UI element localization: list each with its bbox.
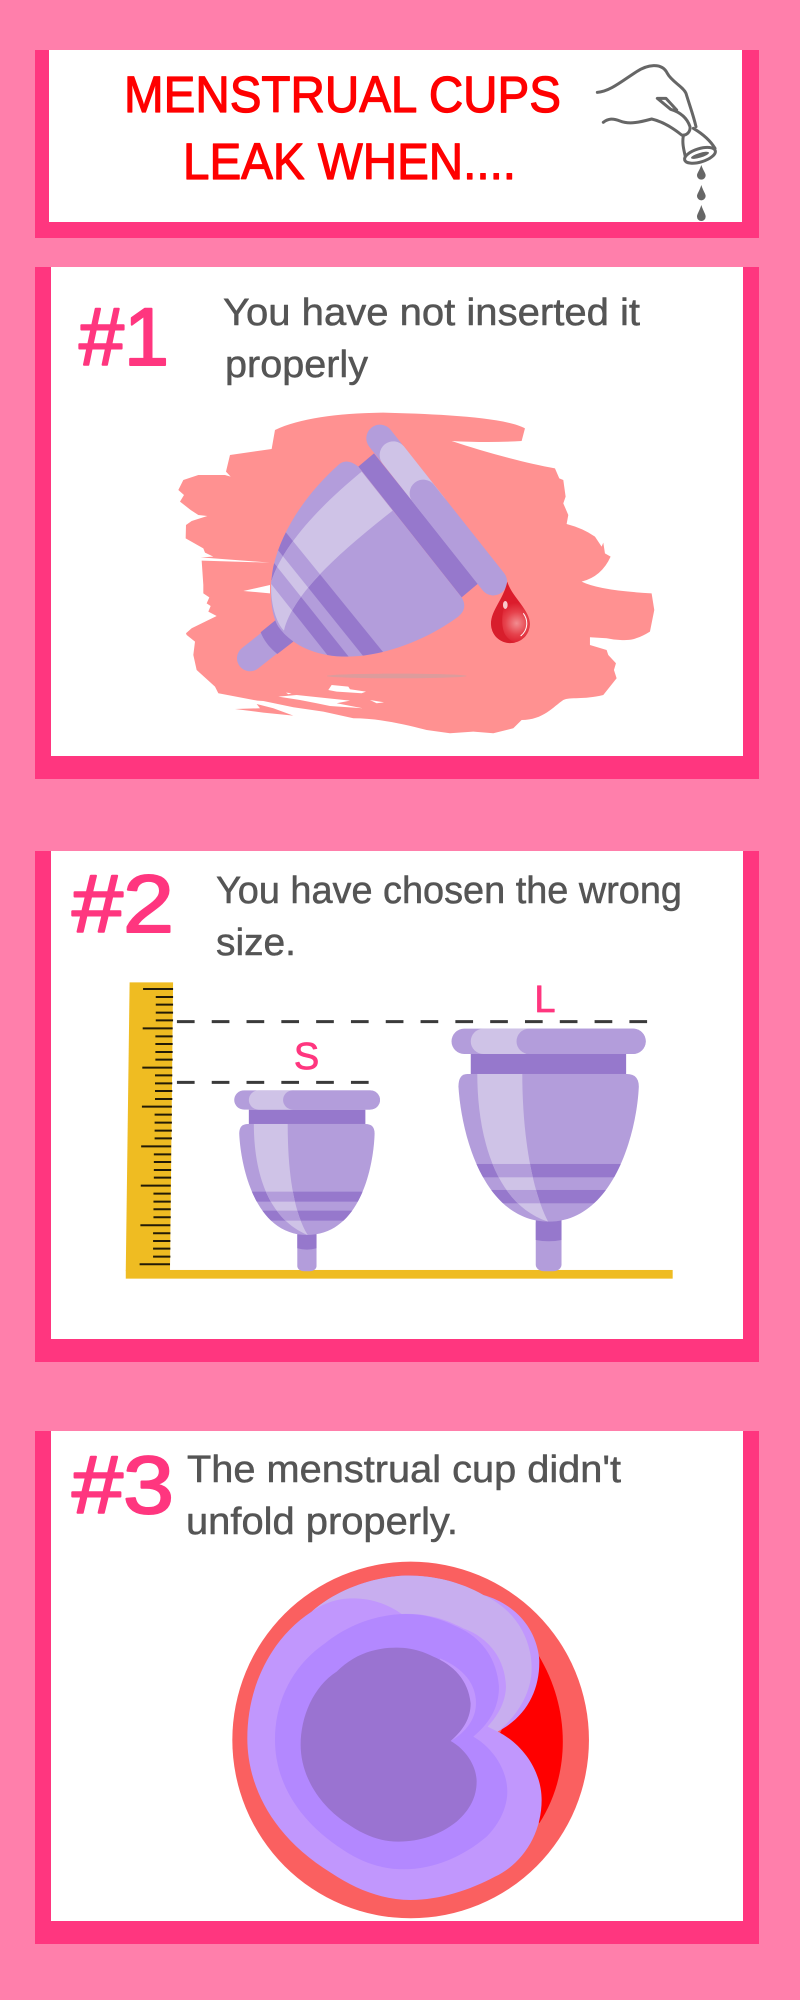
panel: title xyxy=(35,50,759,238)
panel: reason 2 xyxy=(35,851,759,1362)
title: LEAK WHEN.... xyxy=(183,133,516,190)
small cup xyxy=(234,1090,381,1271)
text: reason 2: You have chosen the wrong xyxy=(216,870,682,912)
panel: reason 1 xyxy=(35,267,759,779)
text: reason 2: size. xyxy=(216,922,296,964)
label S: S xyxy=(294,1036,319,1078)
text: reason 3 xyxy=(186,1449,621,1543)
illustration: size comparison chart xyxy=(126,982,673,1279)
title: MENSTRUAL CUPS xyxy=(124,66,561,123)
cup inner crescent xyxy=(440,1658,476,1741)
blood drop xyxy=(491,582,530,643)
icon: hand squeezing cup with drips xyxy=(597,66,717,221)
cup fold highlight xyxy=(312,1576,532,1732)
large cup xyxy=(452,1029,646,1271)
cup middle layer xyxy=(275,1614,507,1869)
number 2: #2 xyxy=(72,859,174,950)
title xyxy=(124,66,561,190)
text: reason 3: unfold properly. xyxy=(186,1501,458,1543)
cup neck band xyxy=(358,453,478,597)
leak gap xyxy=(497,1655,563,1823)
cup inner layer xyxy=(301,1648,477,1842)
text: reason 1: properly xyxy=(225,344,368,386)
illustration: cup not unfolded in circle xyxy=(232,1562,589,1918)
text: reason 1 xyxy=(223,292,640,386)
panel: reason 3 xyxy=(35,1431,759,1944)
brush stroke xyxy=(178,413,654,733)
cup body xyxy=(267,462,464,658)
text: reason 3: The menstrual cup didn't xyxy=(187,1449,621,1491)
text: reason 2 xyxy=(216,870,682,964)
number 1: #1 xyxy=(79,292,169,383)
ruler xyxy=(126,982,673,1279)
illustration: tilted cup on brush stroke with blood drop xyxy=(178,413,654,733)
cup stem xyxy=(250,619,293,658)
label L: L xyxy=(534,979,556,1021)
outer circle xyxy=(232,1562,589,1918)
number 3: #3 xyxy=(72,1440,174,1531)
dashed height lines xyxy=(177,1022,648,1082)
text: reason 1: You have not inserted it xyxy=(223,292,640,334)
cup outer layer xyxy=(247,1576,542,1900)
cup rim xyxy=(380,438,493,582)
